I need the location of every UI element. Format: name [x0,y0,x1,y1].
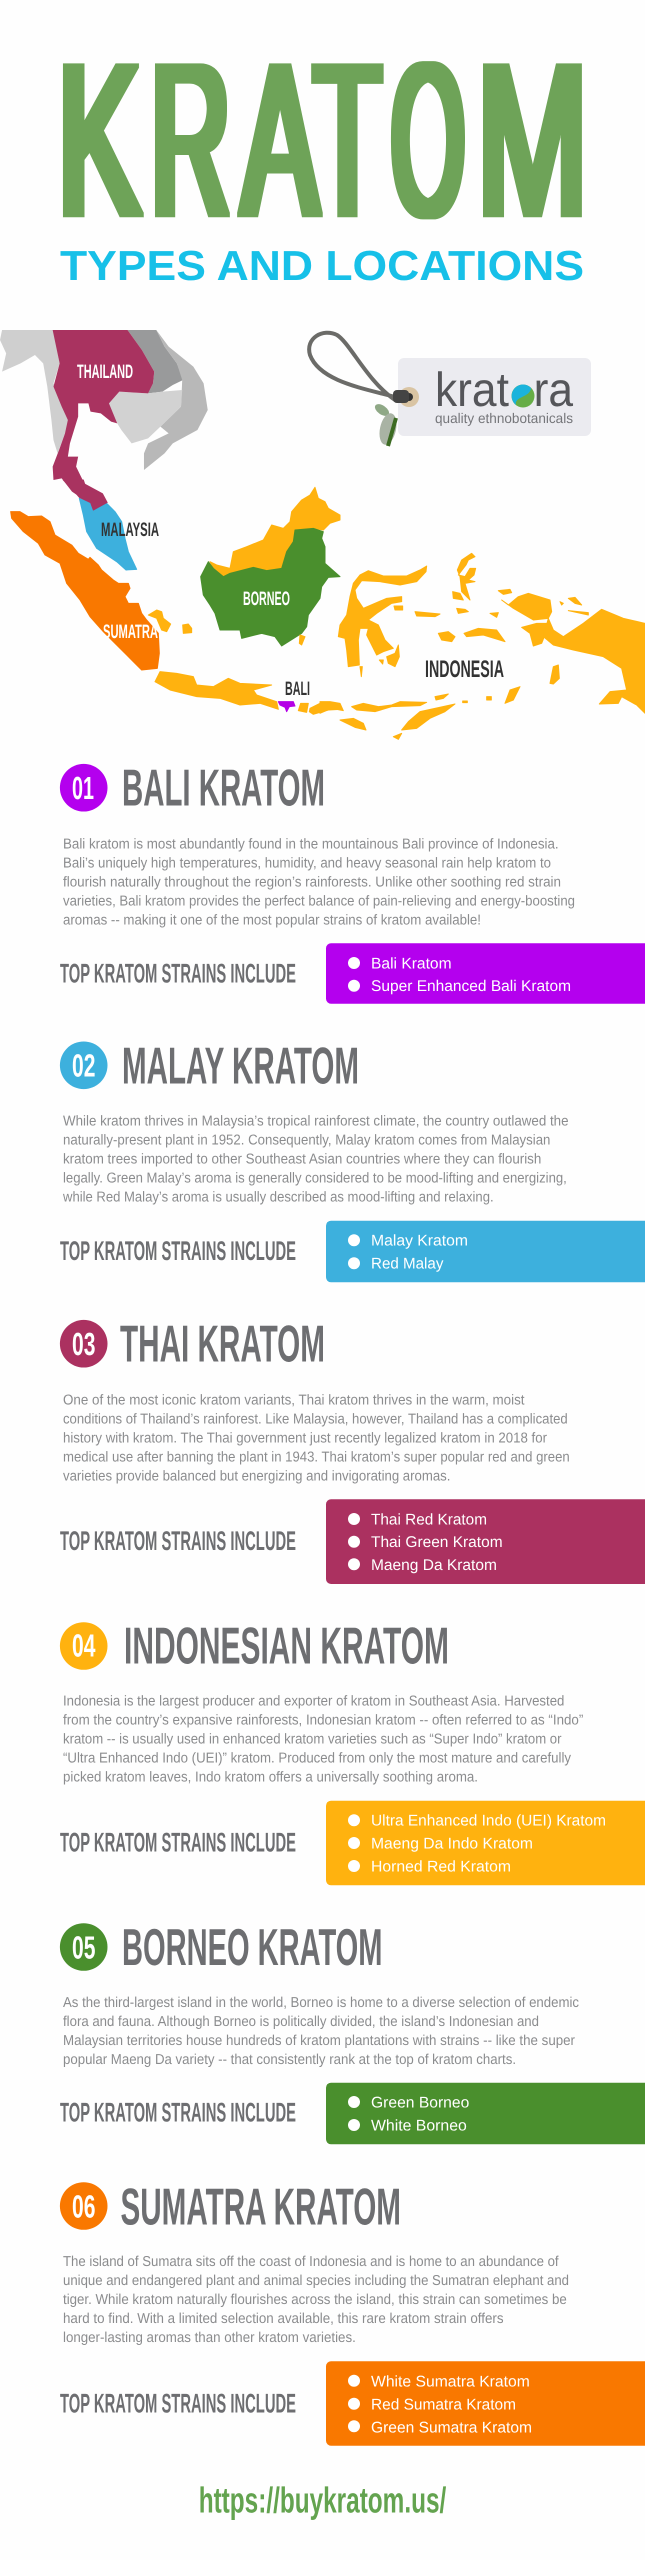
body text [63,836,575,928]
eyelet [393,387,419,407]
strains box: Green Sumatra Kratom [371,2419,532,2436]
body text: naturally-present plant in 1952. Consequently, Malay kratom comes from Malaysian [63,1133,550,1149]
body text [63,2254,569,2346]
number badge [60,2182,108,2230]
title: K [58,19,140,262]
body text: conditions of Thailand’s rainforest. Like Malaysia, however, Thailand has a complicated [63,1411,568,1427]
body text: One of the most iconic kratom variants, Thai kratom thrives in the warm, moist [63,1392,524,1408]
number badge: 05 [72,1929,95,1965]
strains box [326,1221,645,1282]
strains box: White Sumatra Kratom [371,2374,530,2391]
strains box: Ultra Enhanced Indo (UEI) Kratom [371,1813,606,1830]
heading: BALI KRATOM [122,760,325,818]
map label: Bali: BALI [285,678,310,700]
logo tagline: quality ethnobotanicals [435,410,573,426]
map region: Myanmar [0,330,70,453]
title: A [242,19,318,262]
body text: while Red Malay’s aroma is usually described as mood-lifting and relaxing. [62,1190,494,1206]
map: Southeast Asia [0,330,645,739]
title: T [314,19,381,262]
map region: eastern Indonesia islands [320,553,645,739]
body text [63,1694,583,1786]
panel: Bali kratom [60,760,645,1004]
tag loop [309,333,395,400]
map region: Laos [128,330,183,393]
body text [62,1114,569,1206]
number badge: 03 [72,1326,95,1362]
number badge [60,1622,108,1670]
map label: Sumatra: SUMATRA [103,621,158,643]
body text: history with kratom. The Thai government just recently legalized kratom in 2018 for [63,1430,547,1446]
map region: Malaysian Borneo [210,487,340,577]
body text: While kratom thrives in Malaysia’s tropical rainforest climate, the country outlawed the [63,1114,568,1130]
number badge [60,764,108,812]
body text: from the country’s expansive rainforests, Indonesian kratom -- often referred to as “Indo” [63,1713,583,1729]
strains box: Red Malay [371,1256,444,1273]
body text: Malaysian territories house hundreds of kratom plantations with strains -- like the super [63,2033,575,2049]
body text: aromas -- making it one of the most popular strains of kratom available! [63,912,481,928]
number badge: 01 [72,770,94,806]
title: O [392,19,464,262]
body text: hard to find. With a limited selection available, this rare kratom strain offers [63,2311,504,2327]
strains box: Red Sumatra Kratom [371,2396,516,2413]
strains box: Thai Green Kratom [371,1534,503,1551]
title: R [151,19,230,262]
number badge [60,1320,108,1367]
strains box: Maeng Da Kratom [371,1557,497,1574]
panel: Malay kratom [60,1037,645,1282]
strains box: Super Enhanced Bali Kratom [371,978,571,995]
logo wordmark: kratora [435,364,573,417]
body text: “Ultra Enhanced Indo (UEI)” kratom. Produced from only the most mature and carefully [63,1751,572,1767]
map region: Bali [278,702,295,712]
panel: Thai kratom [60,1316,645,1584]
map region: Cambodia [109,390,182,443]
strains box: White Borneo [371,2117,467,2134]
body text: popular Maeng Da variety -- that consistently rank at the top of kratom charts. [63,2052,516,2068]
body text [63,1392,570,1484]
panel: Borneo kratom [60,1919,645,2144]
tag background [398,358,591,436]
body text [63,1995,579,2068]
map region: Sumatra [11,512,159,670]
subtitle: TYPES AND LOCATIONS [60,242,584,289]
panel: Sumatra kratom [60,2178,645,2446]
body text: flora and fauna. Although Borneo is politically divided, the island’s Indonesian and [63,2014,539,2030]
body text: Indonesia is the largest producer and exporter of kratom in Southeast Asia. Harvested [63,1694,564,1710]
strains label: TOP KRATOM STRAINS INCLUDE [60,1828,296,1858]
body text: Bali’s uniquely high temperatures, humidity, and heavy seasonal rain help kratom to [63,855,551,871]
body text: Bali kratom is most abundantly found in the mountainous Bali province of Indonesia. [63,836,559,852]
body text: longer-lasting aromas than other kratom varieties. [63,2330,356,2346]
map region: western Indonesia islands [148,610,340,714]
body text: varieties provide balanced but energizing and invigorating aromas. [63,1468,450,1484]
number badge: 04 [72,1628,96,1664]
map label: Malaysia: MALAYSIA [101,519,159,541]
map region: Malaysia peninsula [79,498,137,570]
strains label: TOP KRATOM STRAINS INCLUDE [60,959,296,989]
number badge [60,1923,108,1971]
strains box [326,943,645,1004]
body text: tiger. While kratom naturally flourishes across the island, this strain can sometimes be [63,2292,567,2308]
number badge: 06 [72,2188,95,2224]
number badge [60,1042,108,1089]
strains box: Thai Red Kratom [371,1511,487,1528]
map label: Thailand: THAILAND [77,361,133,383]
body text: unique and endangered plant and animal species including the Sumatran elephant and [63,2273,569,2289]
strains label: TOP KRATOM STRAINS INCLUDE [60,1236,296,1266]
map region: southern Thailand [63,480,107,510]
heading: MALAY KRATOM [122,1037,359,1095]
strains box: Malay Kratom [371,1233,468,1250]
body text: As the third-largest island in the world, Borneo is home to a diverse selection of endemic [63,1995,579,2011]
map label: Indonesia: INDONESIA [425,656,504,683]
map region: Vietnam [144,330,208,470]
strains box [326,1801,645,1885]
strains box [326,2361,645,2446]
heading: BORNEO KRATOM [122,1919,382,1977]
body text: kratom trees imported to other Southeast Asian countries where they can flourish [63,1152,541,1168]
body text: flourish naturally throughout the region’s rainforests. Unlike other soothing red strain [63,874,561,890]
number badge: 02 [72,1048,95,1084]
strains box: Green Borneo [371,2094,469,2111]
body text: legally. Green Malay’s aroma is generally considered to be mood-lifting and energizing, [63,1171,567,1187]
logo: kratora tag [309,333,591,446]
strains box: Bali Kratom [371,955,452,972]
body text: picked kratom leaves, Indo kratom offers a universally soothing aroma. [63,1770,478,1786]
body text: kratom -- is usually used in enhanced kratom varieties such as “Super Indo” kratom or [63,1732,562,1748]
map region: Borneo [201,528,340,646]
body text: medical use after banning the plant in 1943. Thai kratom’s super popular red and green [63,1449,570,1465]
panel: Indonesian kratom [60,1617,645,1885]
leaves [373,402,399,446]
strains box: Horned Red Kratom [371,1858,511,1875]
strains label: TOP KRATOM STRAINS INCLUDE [60,1526,296,1556]
strains box: Maeng Da Indo Kratom [371,1835,533,1852]
heading: THAI KRATOM [120,1316,325,1374]
footer url: https://buykratom.us/ [199,2480,446,2521]
body text: The island of Sumatra sits off the coast of Indonesia and is home to an abundance of [63,2254,560,2270]
map label: Borneo: BORNEO [243,588,290,610]
strains box [326,1499,645,1584]
body text: varieties, Bali kratom provides the perfect balance of pain-relieving and energy-boosting [63,893,575,909]
strains label: TOP KRATOM STRAINS INCLUDE [60,2388,296,2418]
logo yin-yang mark [512,384,534,408]
map region: Thailand [53,330,154,511]
strains label: TOP KRATOM STRAINS INCLUDE [60,2098,296,2128]
strains box [326,2083,645,2144]
heading: SUMATRA KRATOM [120,2178,401,2236]
